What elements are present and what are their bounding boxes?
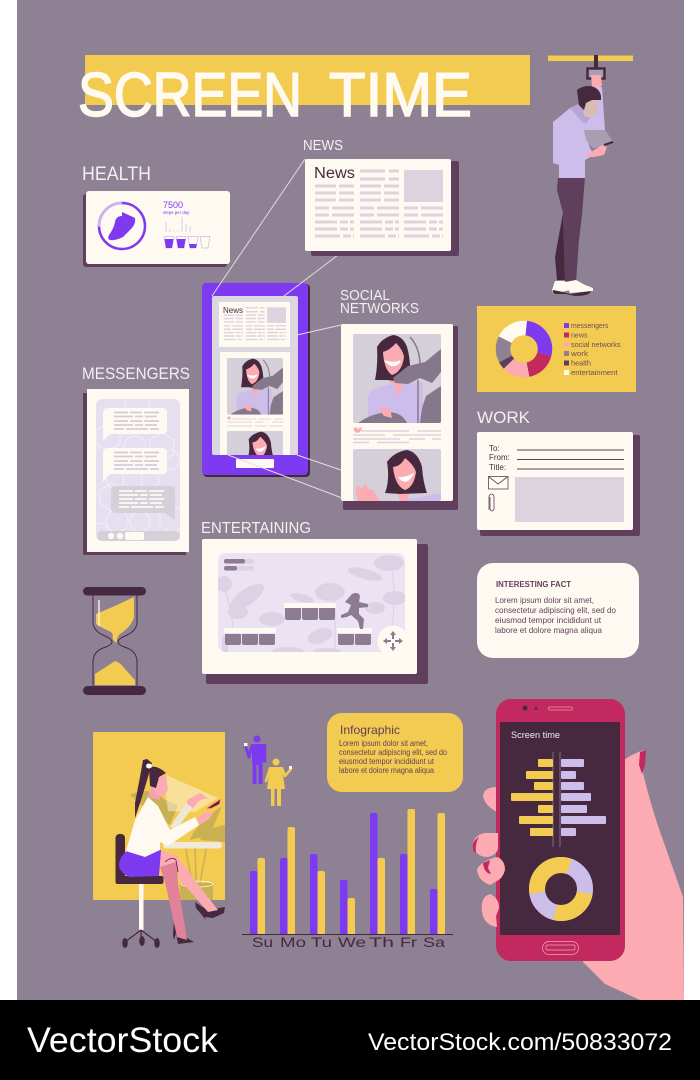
callout: infographic: labore et dolore magna aliqua bbox=[339, 766, 435, 775]
watermark band: VectorStock.com/50833072 bbox=[368, 1029, 672, 1056]
watermark band bbox=[0, 1000, 700, 1080]
panel: health: steps per day bbox=[163, 210, 190, 215]
panel: entertaining: ENTERTAINING bbox=[201, 520, 311, 537]
donut chart bbox=[503, 328, 545, 370]
bar chart: weekly screen time: Fr bbox=[400, 935, 418, 950]
panel: social networks bbox=[340, 287, 458, 510]
icon: man and woman with phones bbox=[244, 736, 292, 806]
panel: entertaining bbox=[201, 520, 428, 684]
shoes bbox=[195, 902, 225, 920]
callout: infographic: eiusmod tempor incididunt ut bbox=[339, 757, 435, 766]
legend: messengers bbox=[571, 323, 609, 330]
connector lines from phone to cards bbox=[212, 159, 342, 498]
panel: work: Title: bbox=[489, 463, 506, 472]
bar chart: weekly screen time: Tu bbox=[311, 935, 332, 950]
bar chart: weekly screen time: Th bbox=[369, 935, 394, 950]
panel: work: To: bbox=[489, 444, 500, 453]
fingers bbox=[473, 833, 498, 857]
panel: messengers bbox=[82, 364, 190, 555]
illustration: seated woman with phone bbox=[93, 732, 225, 948]
chair bbox=[116, 834, 125, 884]
illustration: hand holding smartphone bbox=[473, 699, 684, 1000]
panel: messengers: MESSENGERS bbox=[82, 364, 190, 383]
legend: news bbox=[571, 332, 588, 340]
callout: interesting fact: Lorem ipsum dolor sit amet, bbox=[495, 595, 594, 605]
panel: work bbox=[477, 408, 640, 536]
panel: news: NEWS bbox=[303, 138, 343, 154]
title: SCREEN bbox=[78, 61, 302, 130]
title bbox=[78, 55, 530, 130]
arms and blouse bbox=[170, 800, 192, 830]
phone donut bbox=[537, 865, 585, 913]
bar chart: weekly screen time: Mo bbox=[280, 935, 306, 950]
head and hair bbox=[148, 787, 160, 800]
bar chart: weekly screen time bbox=[242, 809, 453, 950]
panel: news bbox=[303, 138, 459, 256]
bar chart: weekly screen time: Sa bbox=[423, 935, 446, 950]
panel: health: 7500 bbox=[163, 200, 183, 210]
callout: infographic: Infographic bbox=[340, 723, 400, 737]
callout: infographic: Lorem ipsum dolor sit amet, bbox=[339, 739, 428, 748]
central phone bbox=[202, 283, 310, 477]
legend: social networks bbox=[571, 342, 621, 349]
icon: hourglass bbox=[83, 587, 146, 695]
illustration: standing man with phone on a handrail bbox=[548, 55, 633, 296]
title: TIME bbox=[329, 61, 472, 130]
callout: infographic: consectetur adipiscing elit, sed do bbox=[339, 748, 448, 757]
legs bbox=[160, 858, 187, 940]
panel: health: HEALTH bbox=[82, 164, 151, 185]
callout: interesting fact: consectetur adipiscing elit, sed do bbox=[495, 605, 616, 615]
bar chart: weekly screen time: Su bbox=[252, 935, 273, 950]
skirt bbox=[119, 850, 161, 877]
legend: work bbox=[570, 351, 589, 358]
bar chart: weekly screen time: We bbox=[338, 935, 366, 950]
plant bbox=[130, 791, 225, 900]
panel: social networks: NETWORKS bbox=[340, 300, 419, 317]
panel: social networks: SOCIAL bbox=[340, 287, 390, 304]
watermark band: VectorStock bbox=[27, 1021, 219, 1060]
callout: interesting fact: INTERESTING FACT bbox=[496, 580, 571, 589]
game runner bbox=[341, 593, 368, 629]
legend bbox=[564, 323, 621, 377]
panel: usage legend donut bbox=[477, 306, 636, 392]
callout: interesting fact: eiusmod tempor incididunt ut bbox=[495, 615, 602, 625]
legend: health bbox=[571, 360, 591, 368]
panel: health bbox=[82, 164, 230, 267]
panel: work: From: bbox=[489, 453, 510, 462]
callout: interesting fact bbox=[477, 563, 639, 658]
central phone: News bbox=[223, 306, 243, 315]
panel: work: WORK bbox=[477, 408, 531, 427]
illustration: hand holding smartphone: Screen time bbox=[511, 730, 560, 741]
callout: interesting fact: labore et dolore magna aliqua bbox=[495, 625, 602, 635]
panel: news: News bbox=[314, 165, 355, 182]
callout: infographic bbox=[327, 713, 463, 792]
legend: entertainment bbox=[571, 370, 618, 377]
